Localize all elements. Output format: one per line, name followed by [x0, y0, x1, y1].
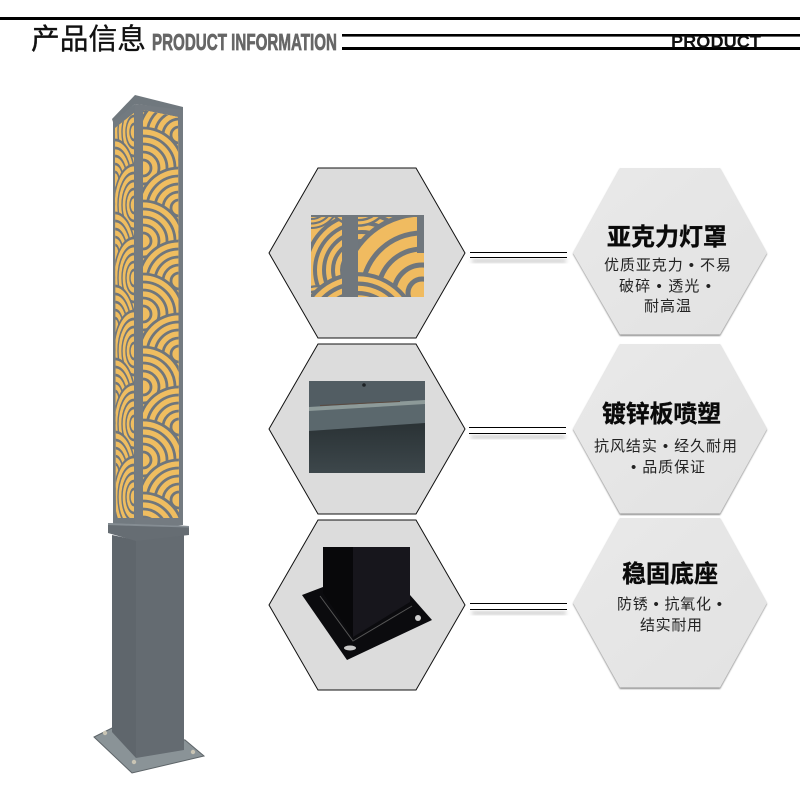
description: 破碎 • 透光 •: [619, 278, 711, 295]
info hexagon 2: [573, 344, 767, 515]
description: [594, 438, 737, 476]
lamp left panel pattern: [115, 113, 134, 518]
lamp body: [113, 104, 183, 530]
collar: [108, 523, 189, 541]
ground plate: [94, 728, 204, 773]
detail photo: coated metal edge: [309, 381, 425, 473]
description: 优质亚克力 • 不易: [604, 257, 731, 274]
detail hexagon 1: [269, 168, 465, 338]
title: product information in Chinese: 产品信息: [31, 23, 146, 56]
connector 3: [470, 603, 567, 615]
connector 2: [469, 427, 566, 439]
lower pole: [112, 535, 184, 758]
description: • 品质保证: [631, 459, 705, 476]
info hexagon 1: [573, 168, 767, 336]
lamp right panel pattern: [143, 110, 179, 518]
header double rule: [342, 34, 800, 50]
description: 耐高温: [644, 298, 691, 315]
detail photo: black base: [302, 547, 432, 660]
lamp post product photo: [93, 95, 205, 774]
info hexagon 3: [573, 518, 767, 689]
header: [31, 23, 800, 56]
feature row 3: stable base: [269, 518, 767, 690]
description: 防锈 • 抗氧化 •: [617, 596, 722, 613]
connector 1: [470, 252, 567, 263]
subtitle: product information: PRODUCT INFORMATION: [152, 29, 337, 55]
description: [617, 596, 722, 634]
feature row 1: acrylic shade: [268, 168, 768, 338]
lamp cap: [112, 95, 183, 122]
header label: product: PRODUCT: [671, 32, 761, 52]
heading: stable base: 稳固底座: [622, 560, 718, 588]
description: [604, 257, 731, 315]
description: 抗风结实 • 经久耐用: [594, 438, 737, 455]
heading: galvanized sheet coating: 镀锌板喷塑: [602, 401, 721, 428]
top rule: [0, 17, 800, 20]
description: 结实耐用: [640, 617, 702, 634]
detail hexagon 3: [269, 520, 465, 690]
heading: acrylic shade: 亚克力灯罩: [607, 224, 727, 251]
feature row 2: galvanized sheet coating: [269, 344, 767, 515]
detail hexagon 2: [269, 344, 465, 514]
detail photo: acrylic pattern: [311, 215, 424, 297]
